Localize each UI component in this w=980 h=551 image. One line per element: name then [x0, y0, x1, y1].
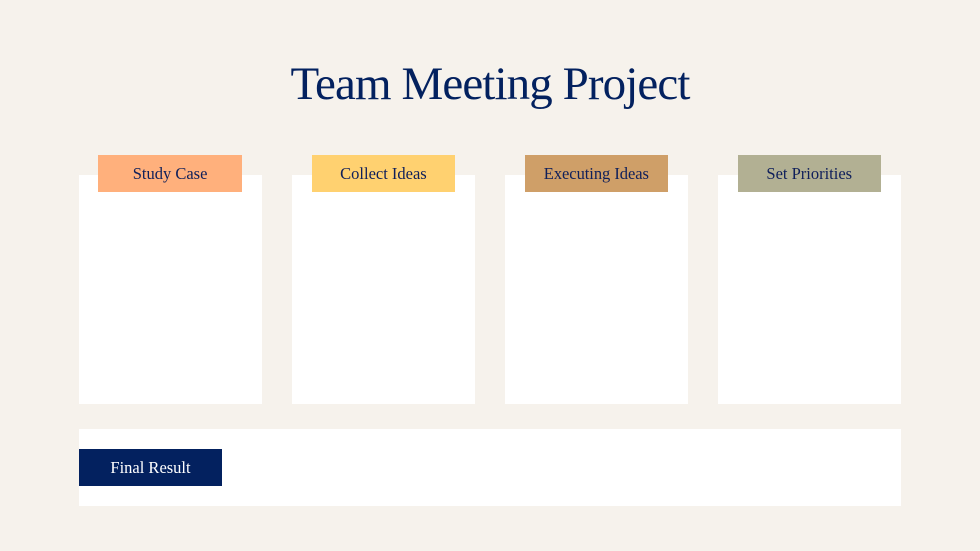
label: set priorities: Set Priorities	[766, 164, 852, 183]
label: collect ideas	[312, 155, 455, 192]
label: final result: Final Result	[110, 458, 191, 477]
label: collect ideas: Collect Ideas	[340, 164, 427, 183]
panel: collect ideas	[292, 174, 474, 404]
panel: final result	[79, 428, 901, 506]
panel: executing ideas	[505, 174, 688, 404]
panel: study case	[79, 174, 262, 404]
label: final result	[79, 449, 222, 486]
panel: set priorities	[718, 174, 901, 404]
title: Team Meeting Project	[291, 58, 689, 110]
label: executing ideas: Executing Ideas	[544, 164, 649, 183]
label: study case	[98, 155, 242, 192]
label: executing ideas	[525, 155, 668, 192]
label: study case: Study Case	[133, 164, 207, 183]
label: set priorities	[738, 155, 881, 192]
